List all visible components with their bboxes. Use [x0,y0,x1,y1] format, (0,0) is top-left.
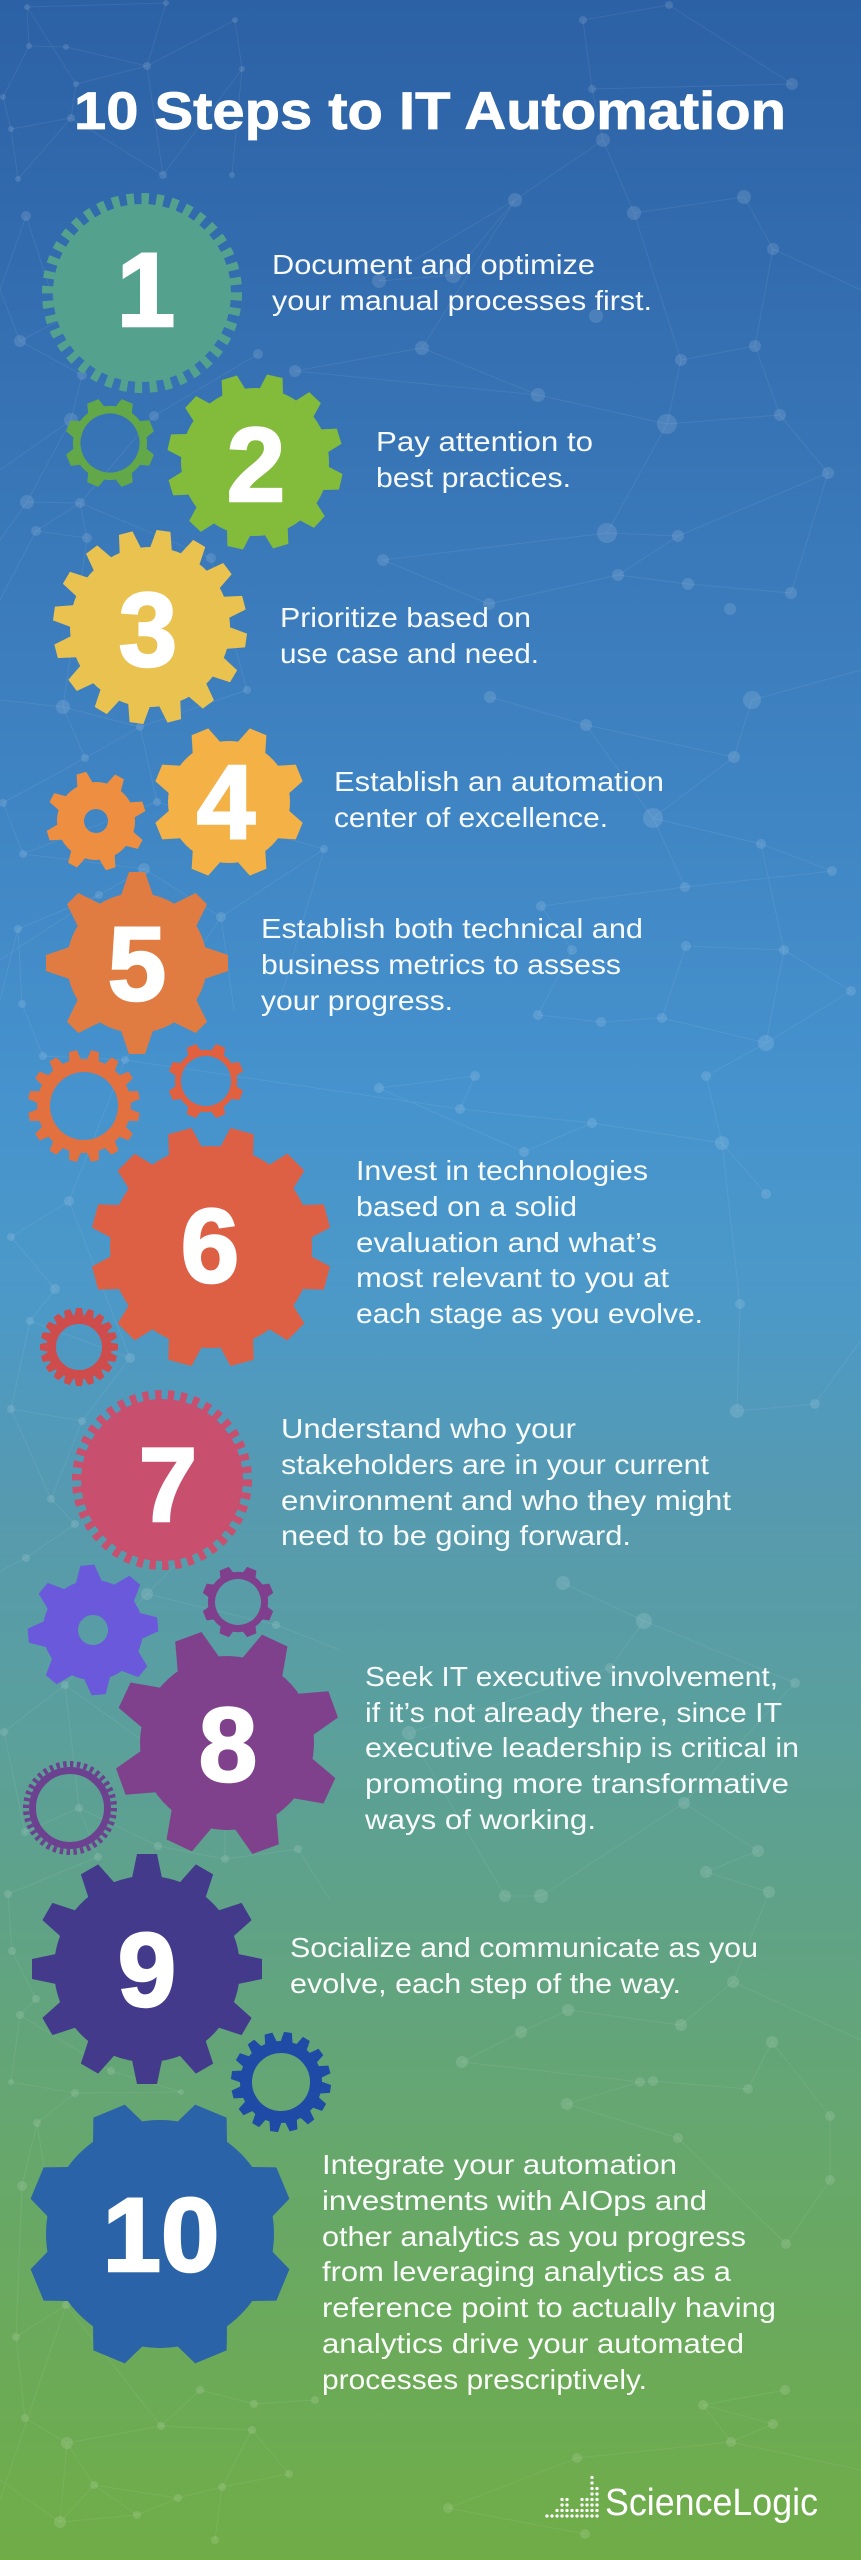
text: step 7: Understand who your [281,1413,576,1444]
text: step 8: if it’s not already there, since IT [365,1697,782,1728]
number 2: 2 [227,407,285,524]
step 1 [48,199,652,387]
text: step 6: Invest in technologies [356,1155,648,1186]
small gear ring: red [40,1308,118,1386]
number 7: 7 [139,1427,197,1544]
text: step 10: processes prescriptively. [322,2364,647,2395]
small gear: orange [28,753,164,889]
text: step 8: executive leadership is critical in [365,1732,799,1763]
text: step 8: ways of working. [364,1804,596,1835]
text: step 8: promoting more transformative [365,1768,789,1799]
text: step 4 [334,766,664,833]
text: step 8: Seek IT executive involvement, [365,1661,778,1692]
number 1: 1 [117,232,175,349]
text: step 7: need to be going forward. [281,1520,631,1551]
text: step 7: stakeholders are in your current [281,1449,709,1480]
number 8: 8 [199,1687,257,1804]
text: step 3 [280,602,539,669]
text: step 2 [376,426,593,493]
small gear ring: orange-red small [156,1031,256,1131]
text: step 9 [290,1932,758,1999]
icon: dot bars [547,2476,597,2516]
text: step 2: best practices. [376,462,571,493]
text: step 5: Establish both technical and [261,913,643,944]
gear 4 [130,703,328,901]
text: step 8 [364,1661,799,1835]
title: 10 Steps to IT Automation [74,82,786,141]
gear 1 [48,199,236,387]
text: step 9: Socialize and communicate as you [290,1932,758,1963]
number 3: 3 [119,572,177,689]
gear 9 [32,1854,262,2084]
text: step 9: evolve, each step of the way. [290,1968,681,1999]
text: step 10: Integrate your automation [322,2149,677,2180]
small gear ring: green [51,384,169,502]
step 9 [32,1854,758,2084]
logo: ScienceLogic [547,2476,818,2524]
text: step 5: your progress. [261,985,453,1016]
text: step 6: each stage as you evolve. [356,1298,703,1329]
step 7 [77,1395,731,1565]
step 5 [46,872,643,1054]
small gear ring: purple [191,1555,285,1649]
text: step 1 [272,249,652,316]
small gear ring: orange-red large [18,1040,150,1172]
text: step 1: your manual processes first. [272,285,652,316]
step 2 [149,356,593,568]
text: step 10: from leveraging analytics as a [322,2256,731,2287]
text: step 10: reference point to actually having [322,2292,776,2323]
small gear: violet [23,1560,163,1700]
gear 3 [40,517,260,737]
gear 8 [77,1593,377,1893]
step 8 [77,1593,799,1893]
number 6: 6 [181,1188,239,1305]
gear 7 [77,1395,247,1565]
gear 10 [0,2060,334,2408]
step 6 [64,1100,703,1394]
text: step 3: Prioritize based on [280,602,531,633]
text: step 4: center of excellence. [334,802,608,833]
step 3 [40,517,539,737]
number 9: 9 [118,1912,176,2029]
text: step 5 [261,913,643,1016]
text: step 3: use case and need. [280,638,539,669]
text: step 10: analytics drive your automated [322,2328,744,2359]
gear 5 [46,872,228,1054]
text: step 7 [281,1413,731,1551]
text: step 2: Pay attention to [376,426,593,457]
text: step 10 [322,2149,776,2395]
text: step 10: other analytics as you progress [322,2221,746,2252]
text: step 4: Establish an automation [334,766,664,797]
small gear ring: fine purple [26,1764,114,1852]
step 4 [130,703,664,901]
number 4: 4 [197,744,255,861]
small gear ring: blue [225,2026,337,2138]
number 5: 5 [108,906,166,1023]
text: step 5: business metrics to assess [261,949,621,980]
text: step 6: evaluation and what’s [356,1227,657,1258]
number 10: 10 [103,2177,219,2294]
step 10 [0,2060,776,2408]
text: step 6: most relevant to you at [356,1262,669,1293]
text: step 6 [356,1155,703,1329]
text: step 6: based on a solid [356,1191,577,1222]
text: step 10: investments with AIOps and [322,2185,707,2216]
gear 6 [64,1100,358,1394]
text: step 7: environment and who they might [281,1485,731,1516]
gear 2 [149,356,361,568]
wordmark: ScienceLogic [605,2482,818,2524]
text: step 1: Document and optimize [272,249,595,280]
